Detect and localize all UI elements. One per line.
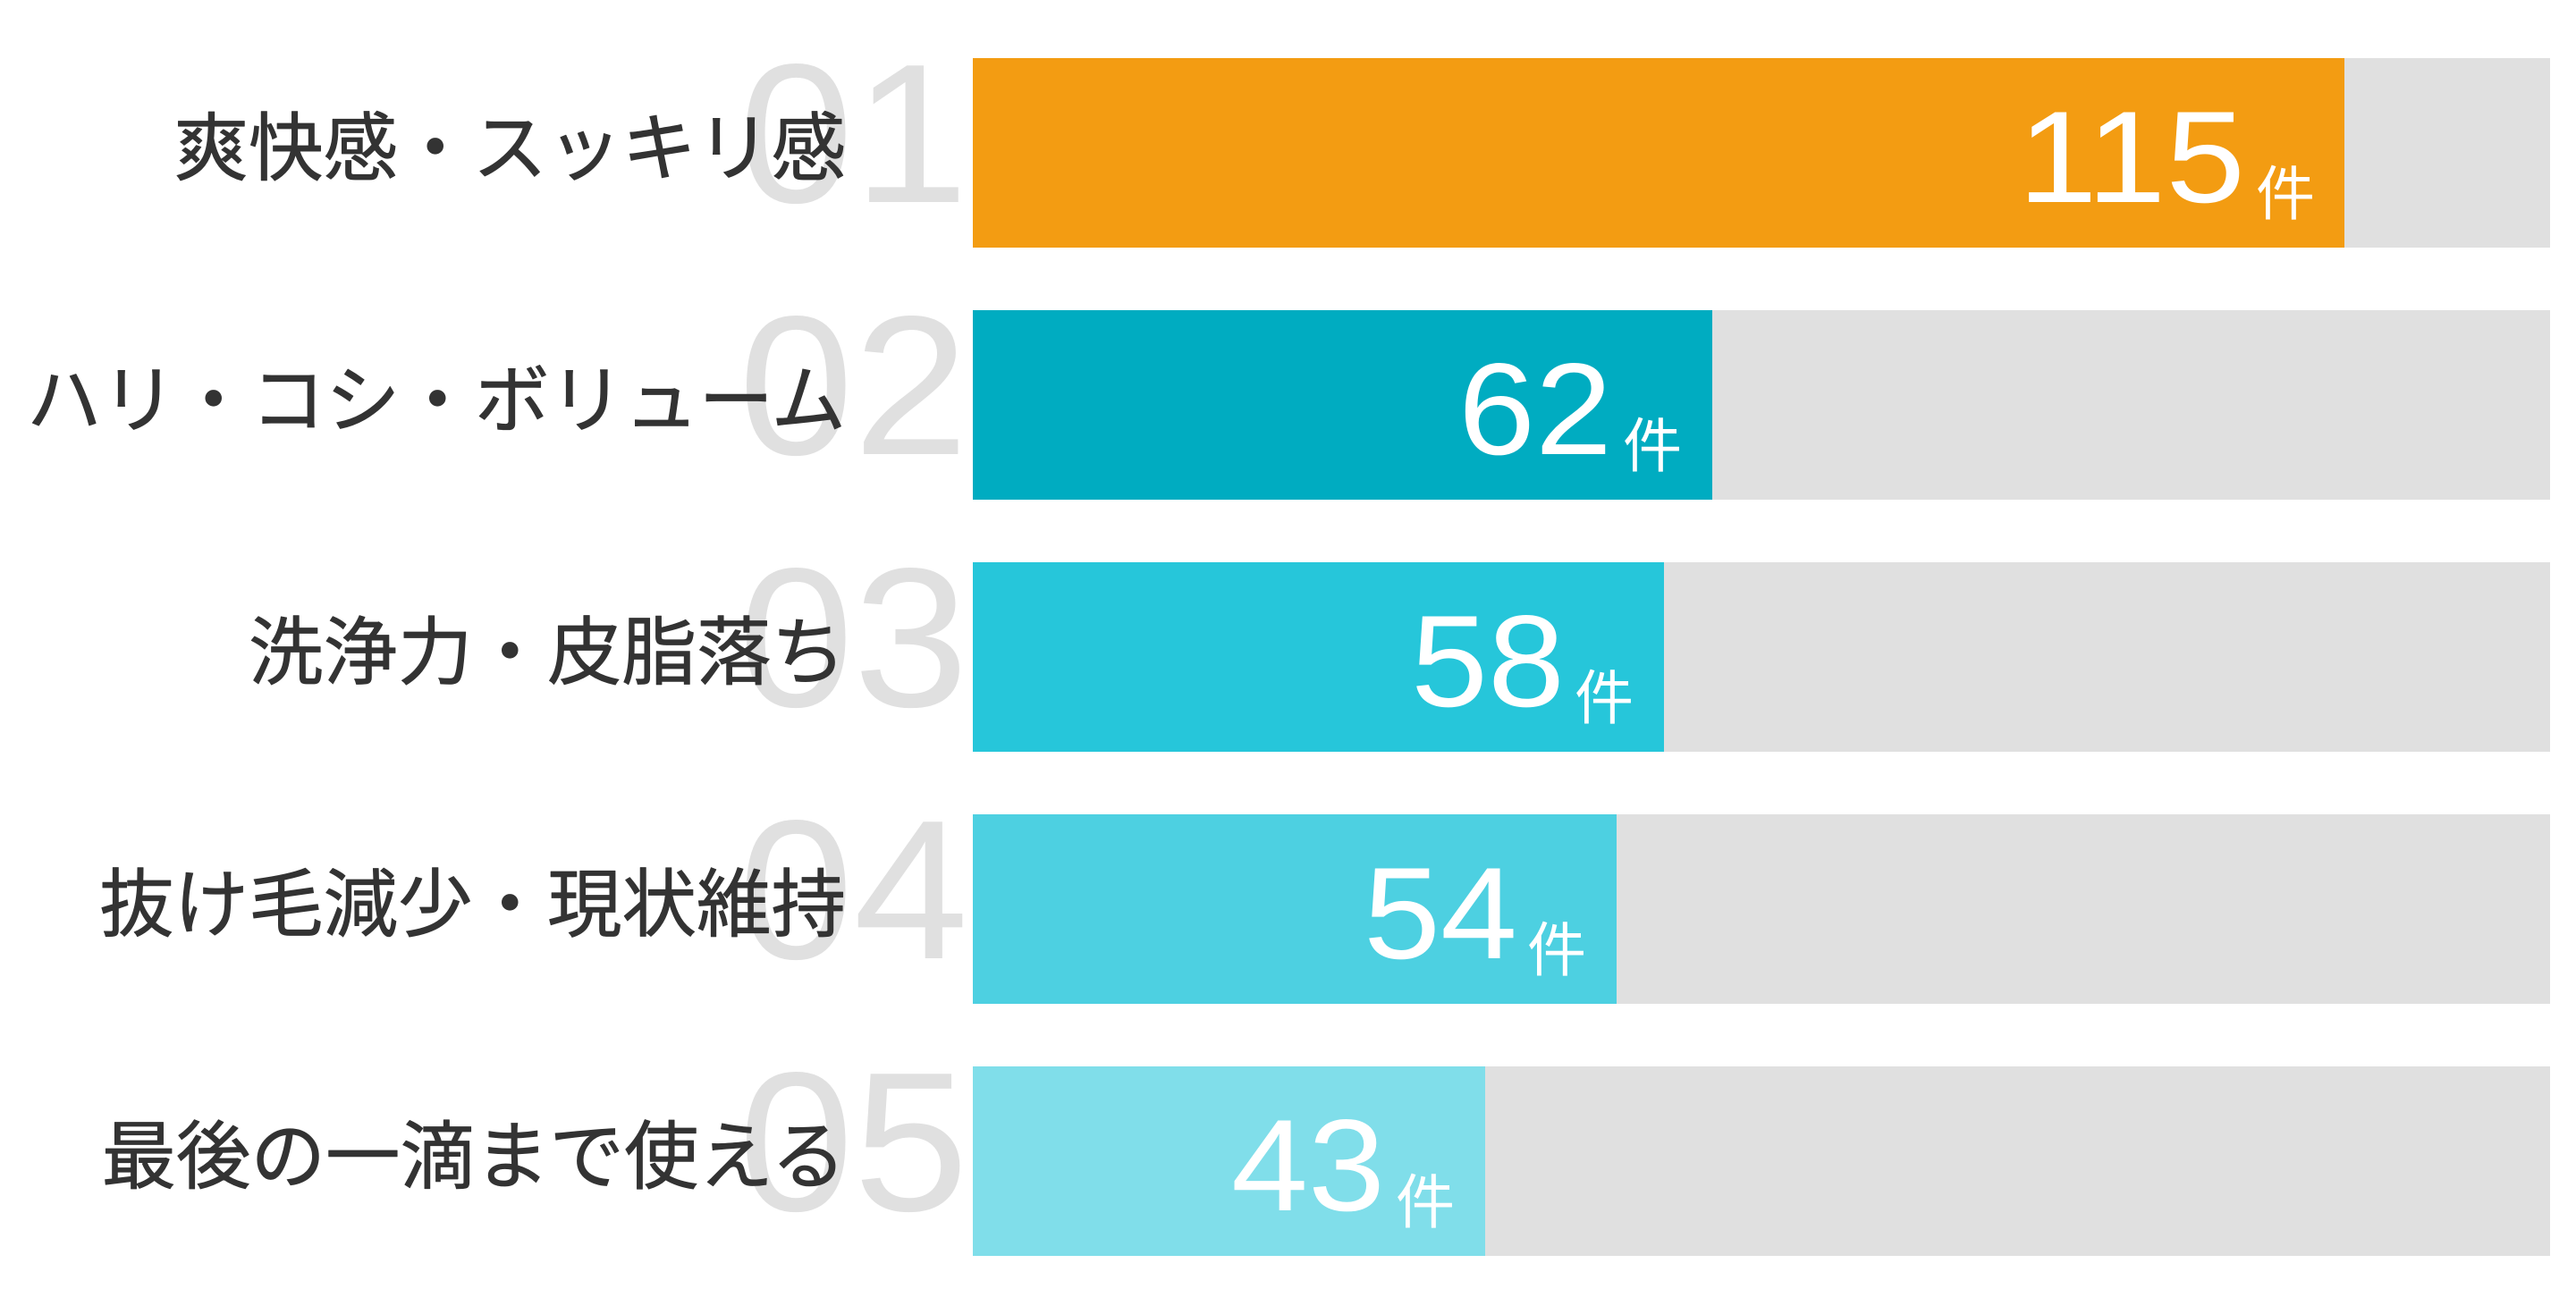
rank number 04: 04 — [739, 779, 968, 1001]
row 2: firmness and volume — [27, 275, 2550, 500]
unit 3: 件 — [1575, 665, 1634, 731]
row 3: cleansing power — [249, 527, 2550, 752]
label 4: 抜け毛減少・現状維持 — [99, 863, 846, 947]
row 4: hair loss reduction — [99, 779, 2550, 1004]
track 2 — [973, 310, 2550, 500]
row 1: refreshing feel — [173, 23, 2550, 248]
label 3: 洗浄力・皮脂落ち — [249, 611, 846, 695]
value 58: 58 — [1411, 588, 1565, 734]
label 5: 最後の一滴まで使える — [102, 1115, 846, 1199]
rank number 02: 02 — [739, 275, 968, 497]
track 3 — [973, 562, 2550, 752]
label 1: 爽快感・スッキリ感 — [173, 106, 846, 190]
fill bar 115 — [973, 58, 2344, 248]
label 2: ハリ・コシ・ボリューム — [27, 358, 846, 442]
row 5: usable to the last drop — [102, 1032, 2550, 1256]
rank number 05: 05 — [739, 1032, 968, 1253]
value 115: 115 — [2018, 84, 2245, 230]
rank number 03: 03 — [739, 527, 968, 749]
value 43: 43 — [1231, 1092, 1385, 1238]
rank number 01: 01 — [739, 23, 968, 245]
fill bar 43 — [973, 1066, 1485, 1256]
track 4 — [973, 814, 2550, 1004]
unit 4: 件 — [1527, 917, 1586, 983]
unit 2: 件 — [1623, 413, 1682, 479]
track 1 — [973, 58, 2550, 248]
value 62: 62 — [1458, 336, 1612, 482]
unit 5: 件 — [1396, 1169, 1455, 1235]
fill bar 58 — [973, 562, 1664, 752]
unit 1: 件 — [2256, 161, 2315, 227]
value 54: 54 — [1364, 840, 1517, 986]
fill bar 62 — [973, 310, 1712, 500]
track 5 — [973, 1066, 2550, 1256]
fill bar 54 — [973, 814, 1617, 1004]
